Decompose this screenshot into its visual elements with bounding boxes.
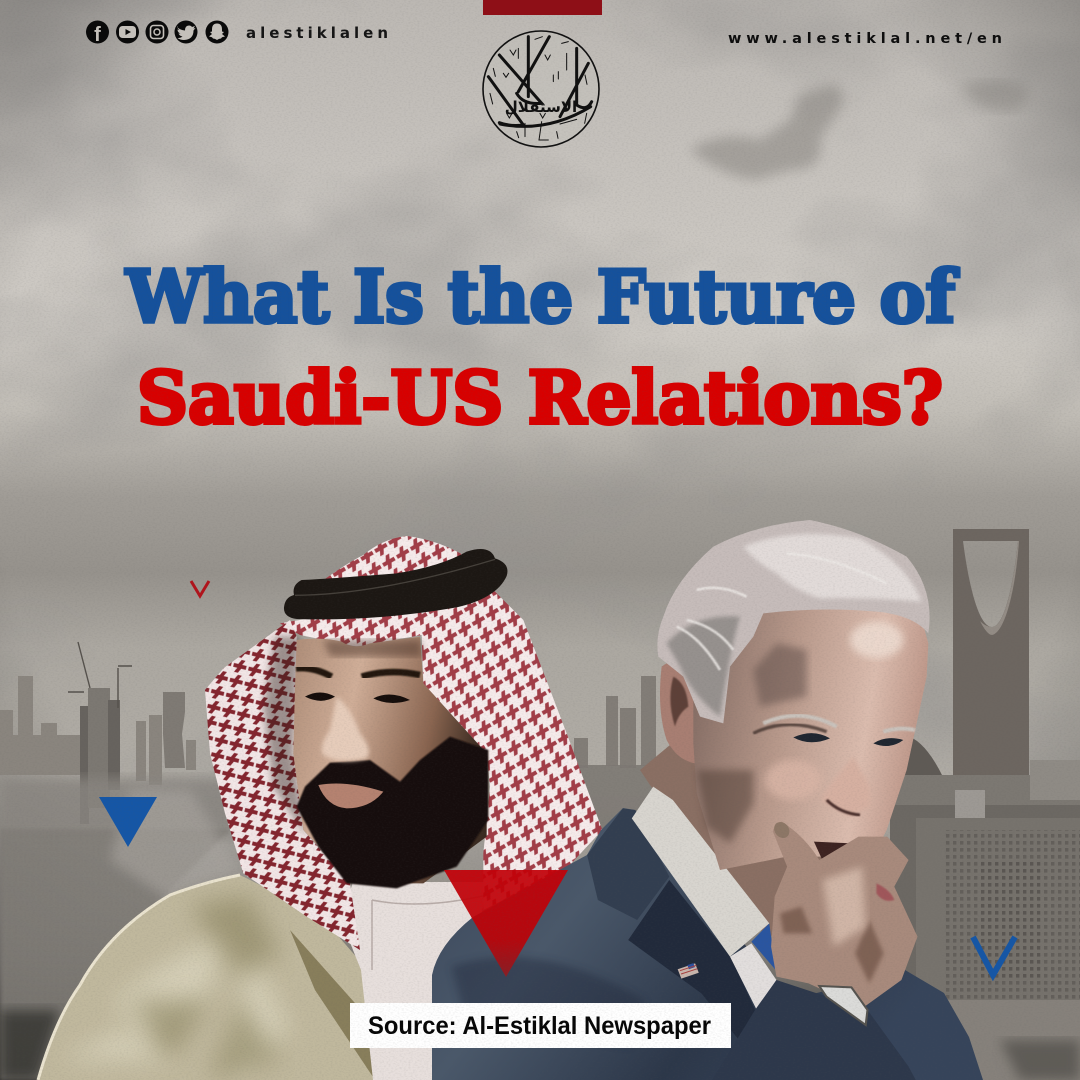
skyline: left twisted tower — [163, 692, 185, 768]
shirt front — [730, 943, 776, 1010]
headdress cap — [323, 536, 471, 587]
face — [693, 597, 928, 870]
nose — [820, 757, 872, 817]
fold shadow — [451, 957, 644, 1047]
social handle: alestiklalen — [246, 24, 388, 42]
mouth — [814, 842, 851, 865]
icon: youtube — [116, 20, 139, 44]
suit jacket — [432, 808, 983, 1080]
brows — [296, 668, 420, 677]
eyes — [305, 692, 410, 703]
icon: twitter — [174, 20, 198, 44]
beard — [297, 737, 488, 888]
hair — [657, 520, 930, 723]
icon: snapchat — [206, 20, 228, 44]
eyes — [793, 733, 903, 746]
headdress shadow — [263, 637, 307, 837]
ground: left halftone shadow — [0, 830, 230, 1080]
large red triangle — [444, 870, 568, 977]
cheek highlight — [765, 760, 822, 800]
figure: man in Saudi headdress — [38, 536, 602, 1080]
skyline: right city — [890, 735, 1080, 1080]
ground: left city blocks — [0, 778, 235, 838]
sleeve — [712, 980, 916, 1080]
upper lapel — [587, 808, 669, 920]
title line 1: What Is the Future of — [125, 254, 959, 339]
website URL: www.alestiklal.net/en — [728, 31, 1002, 47]
skyline: left city — [0, 642, 240, 1080]
watch — [819, 986, 867, 1025]
forehead highlight — [850, 622, 903, 658]
title — [125, 254, 959, 440]
logo wordmark: الاستقلال — [505, 98, 577, 116]
social icons — [86, 20, 228, 46]
white thobe — [341, 882, 488, 1080]
road haze — [110, 790, 240, 900]
headdress left side — [205, 620, 360, 950]
skyline: left tower under construction — [68, 642, 132, 824]
neck — [640, 720, 880, 945]
headdress right side — [280, 587, 602, 910]
icon: instagram — [146, 20, 168, 44]
icon: facebook: f — [94, 24, 101, 46]
bottom left dark corner — [0, 1010, 60, 1080]
top red bar — [483, 0, 602, 15]
forehead shade — [323, 640, 422, 657]
lapel pin — [678, 963, 699, 979]
figure: man in suit — [432, 520, 983, 1080]
icon: facebook — [86, 20, 109, 46]
tie — [751, 923, 776, 970]
icon: small red chevron — [191, 581, 209, 596]
shirt collar — [632, 787, 769, 957]
thumb nail — [771, 819, 792, 841]
headband seam — [295, 559, 495, 595]
source caption: Source: Al-Estiklal Newspaper — [368, 1012, 711, 1040]
face — [293, 637, 487, 883]
skyline: centre towers — [570, 676, 680, 835]
hand — [771, 822, 917, 1008]
collar line — [372, 895, 487, 970]
title line 2: Saudi-US Relations? — [137, 355, 943, 440]
lower lapel — [628, 880, 755, 1047]
source caption — [350, 1003, 731, 1048]
cheek shadow — [697, 770, 753, 843]
temple shadow — [753, 643, 807, 707]
headband — [284, 549, 507, 619]
Kingdom Centre tower — [953, 529, 1029, 799]
ear — [660, 662, 695, 763]
icon: small blue triangle — [99, 797, 157, 847]
robe — [38, 875, 425, 1080]
logo: Al-Estiklal calligraphic seal — [483, 31, 599, 147]
nose — [322, 697, 369, 761]
lips — [318, 783, 383, 808]
icon: blue chevron — [973, 937, 1015, 975]
